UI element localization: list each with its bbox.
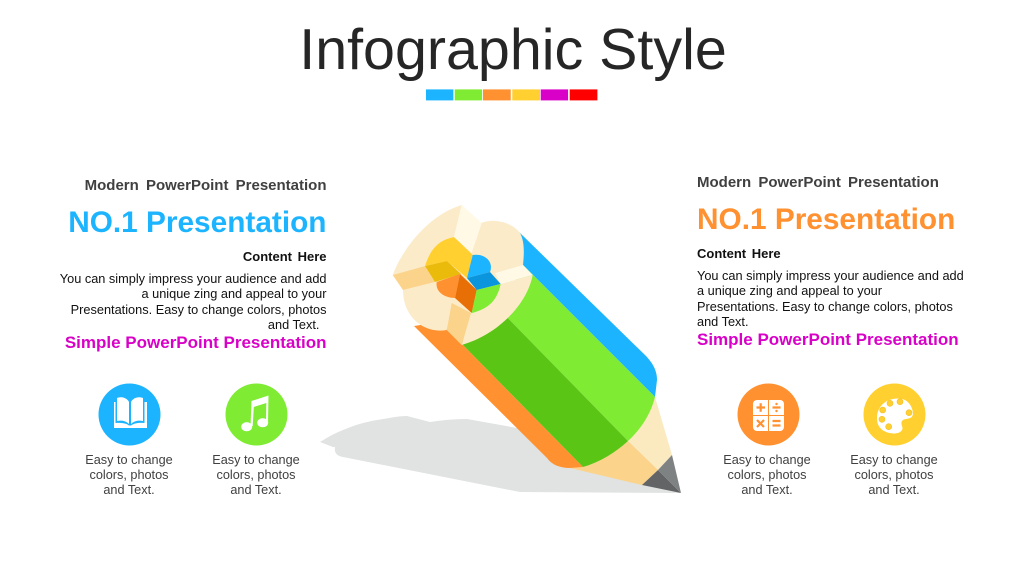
- left heading: NO.1 Presentation: [68, 206, 326, 238]
- caption: book: [85, 452, 173, 497]
- right body text: Presentations. Easy to change colors, photos: [697, 299, 953, 314]
- pencil body: [414, 232, 657, 468]
- left body text: You can simply impress your audience and add: [60, 271, 326, 286]
- caption: music: [212, 452, 300, 497]
- caption: palette: colors, photos: [854, 468, 934, 482]
- right heading: NO.1 Presentation: [697, 202, 955, 236]
- caption: calculator: colors, photos: [728, 468, 806, 482]
- caption: book: Easy to change: [85, 452, 173, 466]
- title: Infographic Style: [299, 18, 727, 82]
- caption: music: and Text.: [230, 483, 282, 497]
- left subheading: Modern PowerPoint Presentation: [85, 177, 326, 194]
- left body text: and Text.: [268, 317, 319, 332]
- icon: music note: [226, 384, 288, 446]
- left content label: Content Here: [243, 249, 326, 264]
- icon: calculator: [738, 384, 800, 446]
- left body text: Presentations. Easy to change colors, photos: [71, 302, 326, 317]
- caption: calculator: [723, 452, 811, 497]
- icon: book: [98, 384, 160, 446]
- caption: palette: [850, 452, 938, 497]
- pencil end: coloured core: [393, 205, 533, 345]
- left tagline: Simple PowerPoint Presentation: [65, 333, 326, 352]
- left body text: a unique zing and appeal to your: [141, 286, 326, 301]
- right body text: [697, 268, 964, 329]
- pencil shadow: [320, 416, 681, 493]
- caption: book: colors, photos: [90, 468, 168, 482]
- caption: music: colors, photos: [216, 468, 296, 482]
- pencil lead: [642, 455, 681, 493]
- right body text: a unique zing and appeal to your: [697, 283, 882, 298]
- caption: calculator: and Text.: [741, 483, 793, 497]
- right body text: and Text.: [697, 314, 749, 329]
- caption: palette: Easy to change: [850, 452, 938, 466]
- right text panel: [697, 174, 964, 349]
- pencil wood tip: [570, 397, 672, 485]
- right body text: You can simply impress your audience and add: [697, 268, 964, 283]
- colour bar: [426, 89, 598, 100]
- right subheading: Modern PowerPoint Presentation: [697, 174, 939, 191]
- icon: paint palette: [864, 384, 926, 446]
- caption: book: and Text.: [103, 483, 155, 497]
- caption: palette: and Text.: [868, 483, 920, 497]
- right tagline: Simple PowerPoint Presentation: [697, 330, 959, 349]
- left text panel: [60, 177, 326, 352]
- caption: calculator: Easy to change: [723, 452, 811, 466]
- caption: music: Easy to change: [212, 452, 300, 466]
- right content label: Content Here: [697, 246, 781, 261]
- left body text: [60, 271, 326, 332]
